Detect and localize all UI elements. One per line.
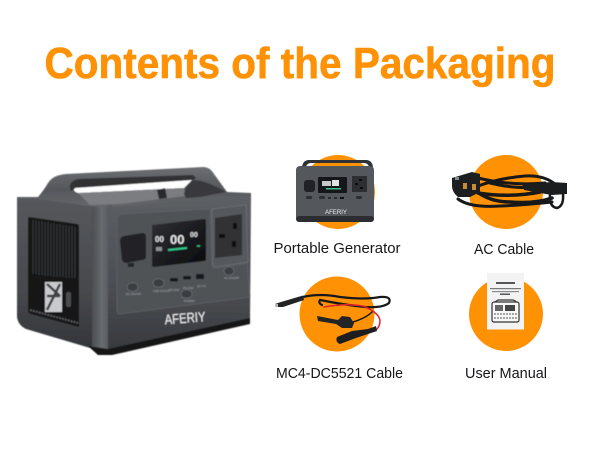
small labels: PD 20W bbox=[183, 286, 194, 290]
item: MC4-DC5521 cable bbox=[275, 276, 403, 382]
DC socket cover bbox=[120, 233, 146, 263]
body corner bbox=[92, 205, 112, 354]
icon: AC cable coil bbox=[452, 172, 567, 208]
small labels: QC 3.0 bbox=[197, 284, 206, 288]
label: Portable Generator bbox=[274, 241, 401, 257]
title: Contents of the Packaging bbox=[44, 39, 556, 88]
base bbox=[88, 318, 250, 355]
icon: MC4 cable bbox=[275, 295, 390, 344]
control buttons bbox=[127, 267, 234, 298]
icon: generator front view: AFERIY bbox=[325, 210, 347, 216]
front panel outline bbox=[117, 209, 250, 314]
usb port bbox=[66, 292, 71, 307]
orange circle bbox=[300, 276, 374, 352]
body left face bbox=[17, 199, 97, 350]
label: AC Cable bbox=[474, 242, 534, 258]
LCD screen: 00 bbox=[170, 232, 184, 247]
handle bbox=[17, 167, 251, 212]
item: user manual bbox=[465, 273, 547, 382]
LCD screen: 00 bbox=[190, 232, 198, 239]
LCD screen: 00 bbox=[155, 235, 164, 244]
small labels: USB ON/OFF bbox=[153, 289, 170, 293]
small labels: POWER bbox=[184, 299, 195, 303]
LCD screen bbox=[152, 219, 206, 267]
small labels: PD 60W bbox=[169, 288, 180, 292]
small labels: AC ON/OFF bbox=[224, 276, 240, 280]
small labels: DC ON/OFF bbox=[126, 292, 142, 296]
AC outlet bbox=[215, 214, 242, 258]
item: portable generator bbox=[274, 155, 401, 257]
main product: portable power station bbox=[17, 167, 251, 355]
vent panel bbox=[28, 217, 79, 327]
icon: manual booklet bbox=[487, 273, 524, 330]
orange circle bbox=[469, 277, 543, 351]
body front face bbox=[108, 195, 251, 354]
small labels bbox=[126, 276, 240, 303]
orange circle bbox=[469, 155, 543, 229]
orange circle bbox=[301, 155, 375, 229]
brand logo: AFERIY bbox=[164, 308, 207, 327]
item: AC cable bbox=[452, 155, 567, 258]
label: User Manual bbox=[465, 366, 547, 382]
usb ports bbox=[170, 274, 204, 282]
flashlight bbox=[45, 282, 62, 312]
label: MC4-DC5521 Cable bbox=[276, 366, 403, 382]
